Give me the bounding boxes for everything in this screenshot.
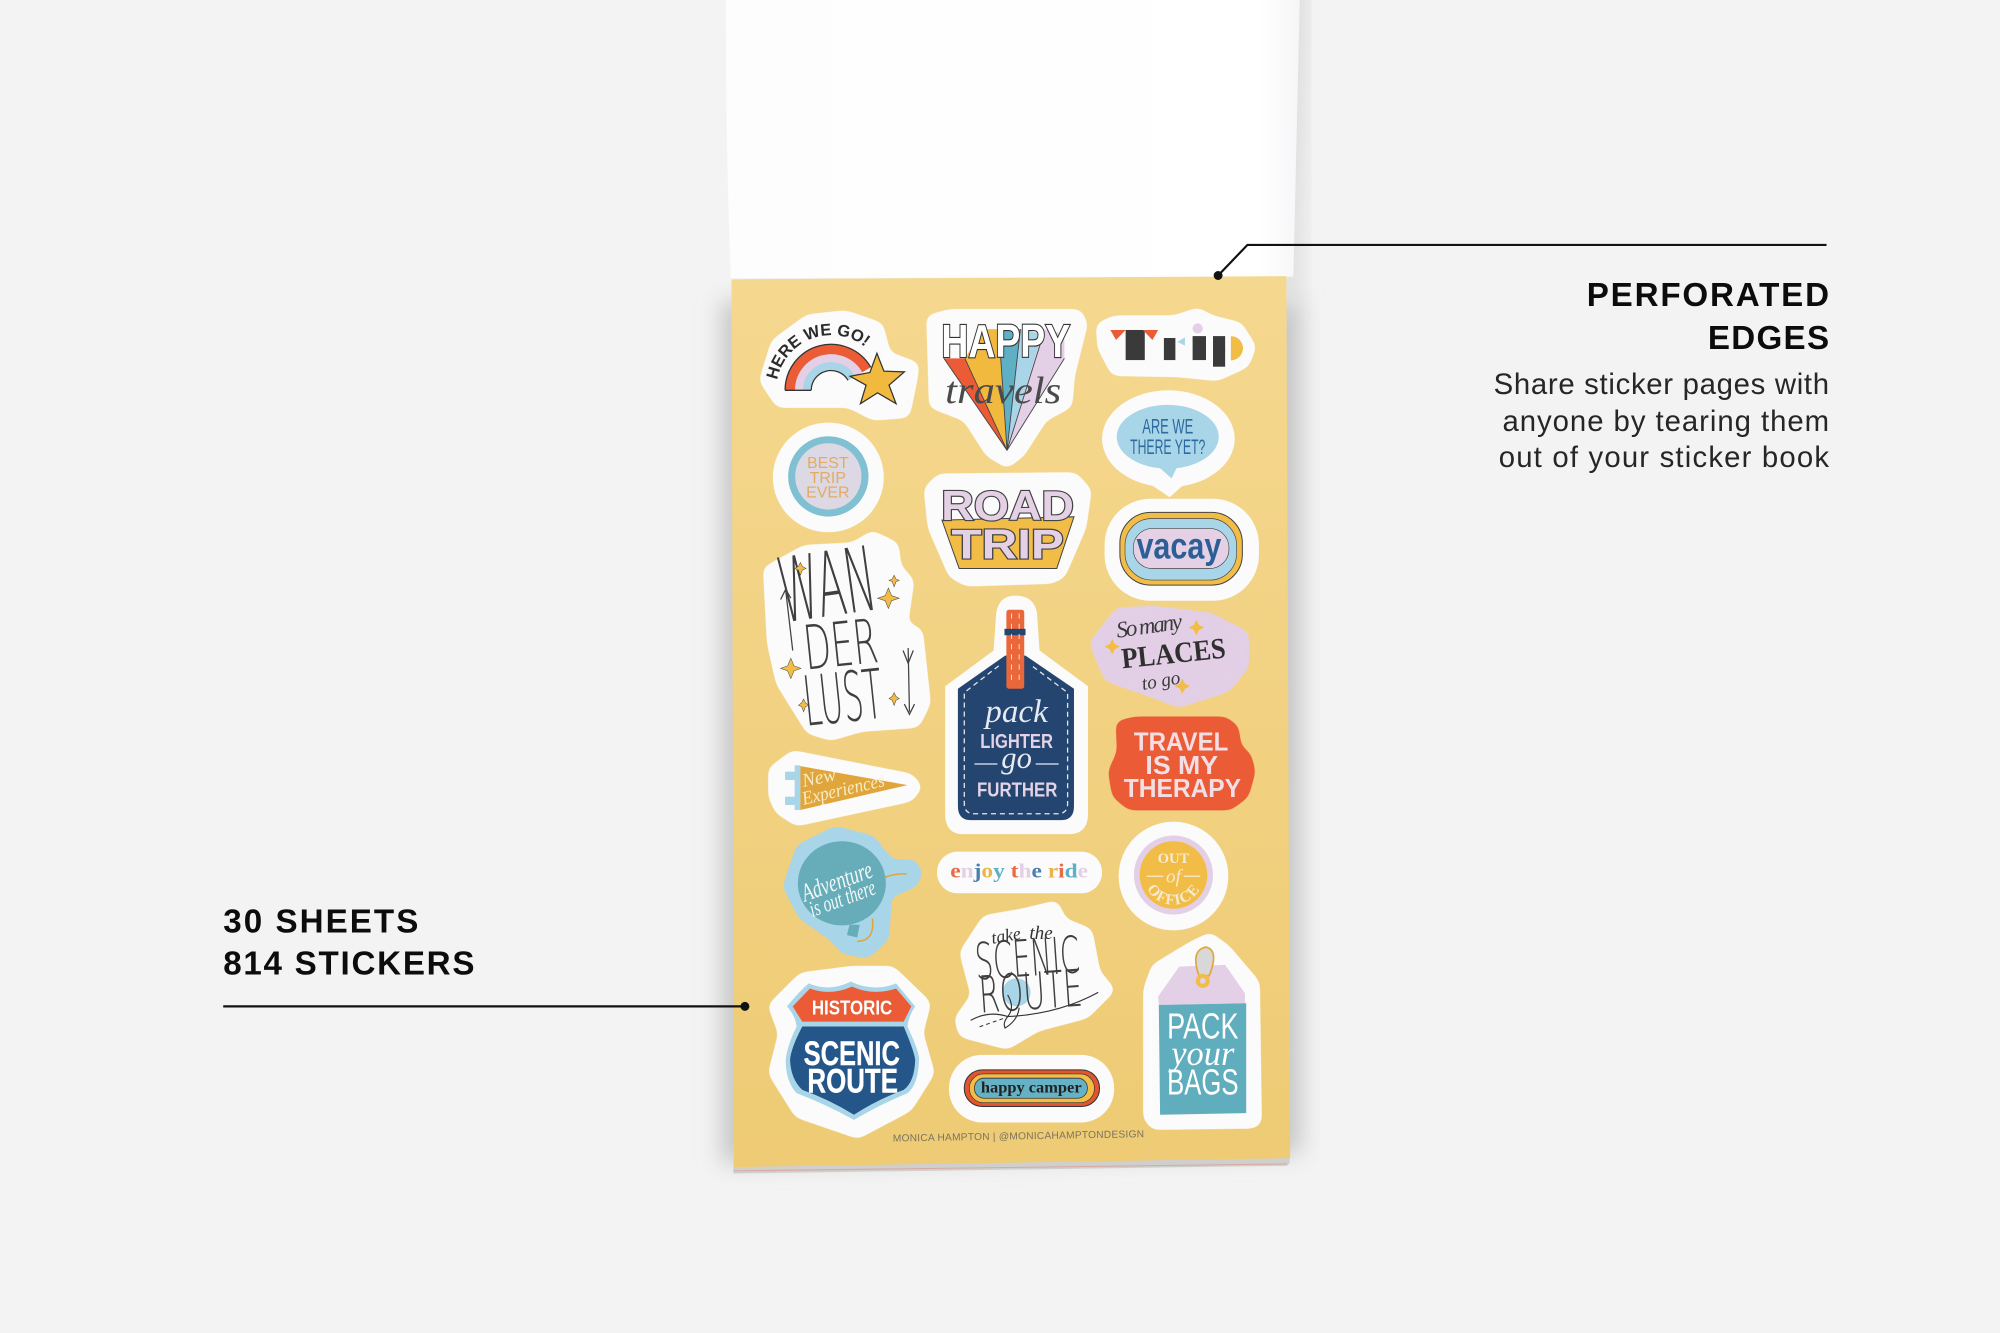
sticker: road trip: [929, 477, 1087, 582]
callout: sheet and sticker count text: [223, 903, 474, 982]
sticker: historic scenic route shield: [773, 971, 930, 1134]
sticker: enjoy the ride: enjoy the ride: [950, 861, 1088, 883]
sticker: best trip ever: BEST: [807, 455, 849, 472]
sticker: happy travels: HAPPY: [941, 315, 1070, 367]
callout: sheet count leader line: [223, 1002, 749, 1011]
sticker: happy travels: travels: [945, 370, 1061, 412]
sticker: out of office: [1118, 822, 1228, 930]
sticker: adventure balloon: [787, 830, 918, 954]
sticker: happy camper: [949, 1055, 1114, 1122]
sticker: wanderlust: [768, 528, 926, 743]
book shadow: [722, 0, 1306, 1163]
callout: sheet and sticker count text: 30 SHEETS: [223, 903, 418, 940]
sticker: take the scenic route: take: [990, 923, 1022, 948]
sticker: best trip ever: TRIP: [810, 470, 846, 487]
sticker: take the scenic route: SCENIC: [973, 926, 1082, 993]
sticker: happy travels: [931, 314, 1083, 463]
sticker: are we there yet: ARE WE: [1142, 414, 1193, 439]
sticker: luggage tag: FURTHER: [977, 780, 1058, 802]
sticker: best trip ever: EVER: [806, 484, 850, 501]
sticker: pack your bags tag: BAGS: [1167, 1062, 1239, 1102]
sticker: take the scenic route: ROUTE: [977, 960, 1084, 1026]
sticker: here we go: [760, 310, 919, 420]
sticker: travel is my therapy: THERAPY: [1124, 775, 1241, 803]
sticker: wanderlust: LUST: [800, 655, 887, 743]
callout: perforated edges text: PERFORATED: [1587, 277, 1829, 314]
sticker: so many places to go: So many: [1115, 609, 1185, 643]
sticker: best trip ever: [773, 423, 884, 532]
sticker: are we there yet: [1102, 390, 1235, 495]
sticker: trip: r: [1166, 340, 1174, 361]
sticker: new experiences pennant: [773, 755, 917, 821]
sticker: wanderlust: DER: [800, 606, 881, 685]
sticker: luggage tag: pack: [983, 693, 1049, 730]
sticker: vacay: vacay: [1136, 526, 1222, 567]
sticker: pack your bags tag: [1148, 938, 1257, 1125]
sticker: road trip: ROAD: [941, 482, 1074, 529]
callout: perforated edges text: EDGES: [1708, 320, 1829, 357]
white torn-back page: [726, 0, 1300, 278]
callout: perforated edges leader line: [1214, 245, 1827, 280]
callout: perforated edges text: out of your sticker book: [1499, 441, 1829, 474]
sticker: out of office: of: [1166, 867, 1184, 888]
callout: perforated edges text: [1494, 277, 1829, 474]
sticker: trip: p: [1214, 340, 1226, 361]
sticker: travel is my therapy: IS MY: [1145, 752, 1218, 780]
sticker: trip: [1101, 313, 1251, 376]
yellow sticker sheet: [732, 276, 1290, 1167]
sticker: wanderlust: WAN: [772, 528, 882, 644]
sticker: so many places to go: to go: [1140, 668, 1182, 695]
sticker: historic scenic route shield: HISTORIC: [812, 998, 892, 1020]
sticker: out of office: OUT: [1158, 851, 1190, 867]
sticker: adventure balloon: is out there: [806, 875, 879, 922]
sticker: so many places to go: [1094, 609, 1244, 703]
sticker: road trip: TRIP: [952, 520, 1064, 567]
sticker: enjoy the ride: [937, 852, 1102, 893]
sticker: take the scenic route: [959, 906, 1110, 1045]
sticker: new experiences pennant: Experiences: [799, 770, 887, 810]
sticker: are we there yet: THERE YET?: [1130, 434, 1205, 459]
callout: sheet and sticker count text: 814 STICKERS: [223, 945, 474, 982]
page stack edge: [733, 1154, 1290, 1173]
credit line: MONICA HAMPTON | @MONICAHAMPTONDESIGN: [893, 1129, 1144, 1145]
sticker: pack your bags tag: your: [1168, 1035, 1235, 1073]
callout: perforated edges text: anyone by tearing them: [1503, 405, 1829, 438]
sticker: travel is my therapy: TRAVEL: [1134, 729, 1228, 757]
sticker: trip: T: [1129, 340, 1141, 361]
sticker: travel is my therapy: [1112, 721, 1251, 806]
sticker: historic scenic route shield: SCENIC: [804, 1035, 900, 1073]
sticker: adventure balloon: Adventure: [796, 855, 876, 908]
sticker: luggage tag: go: [1001, 741, 1032, 775]
sticker: trip: i: [1196, 340, 1202, 361]
sticker: pack your bags tag: PACK: [1167, 1006, 1239, 1046]
sticker: so many places to go: PLACES: [1120, 633, 1227, 675]
sticker: take the scenic route: the: [1029, 923, 1053, 944]
callout: perforated edges text: Share sticker pages with: [1494, 368, 1829, 401]
sticker: new experiences pennant: New: [799, 764, 838, 792]
sticker: historic scenic route shield: ROUTE: [807, 1062, 898, 1100]
sticker: here we go: HERE WE GO!: [766, 324, 870, 379]
sticker: happy camper: happy camper: [981, 1079, 1082, 1096]
sticker: out of office: OFFICE: [1148, 884, 1200, 905]
sticker: luggage tag: [945, 596, 1088, 834]
sticker: vacay: [1105, 499, 1259, 601]
sticker: luggage tag: LIGHTER: [980, 731, 1053, 753]
